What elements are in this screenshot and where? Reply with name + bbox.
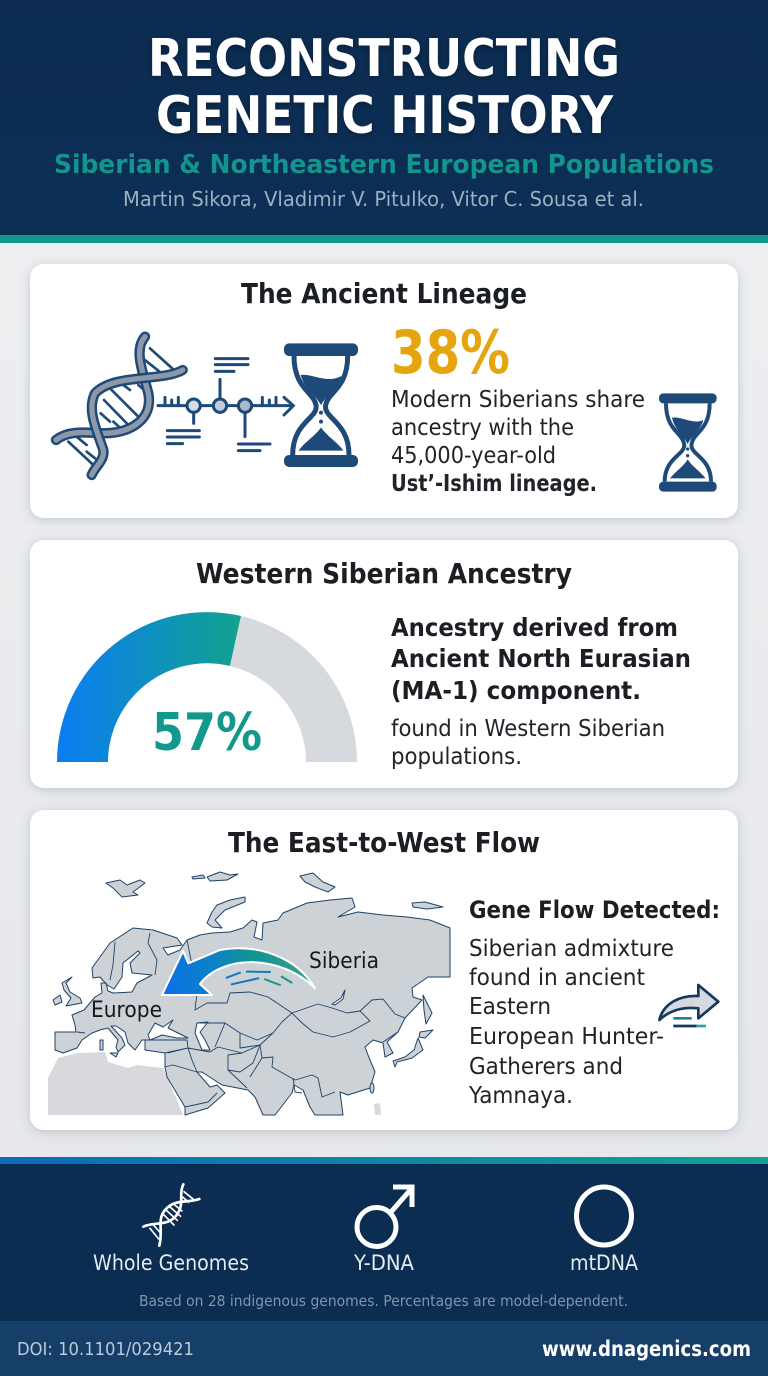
label: europe: Europe (91, 998, 162, 1023)
text: gene flow description: Yamnaya. (468, 1083, 573, 1109)
text: ust-ishim description: Modern Siberians share (391, 387, 645, 413)
map: middle east land patch (166, 1040, 262, 1088)
icon: dna helix (56, 337, 183, 475)
icon: mtdna circle (576, 1187, 632, 1245)
chart: gauge 57% (57, 612, 357, 763)
arrow dashes (227, 972, 292, 985)
panel: east-to-west flow (30, 810, 738, 1130)
label: mtdna: mtDNA (570, 1251, 639, 1275)
text: gene flow description: Siberian admixture (469, 936, 674, 962)
timeline arrow (158, 359, 293, 451)
map: eurasia with gene flow arrow (48, 872, 450, 1115)
chart: gauge 57%: 57% (152, 703, 262, 763)
text: ancestry description: populations. (391, 744, 522, 770)
label: whole genomes: Whole Genomes (93, 1251, 249, 1275)
text: ancestry description (391, 613, 691, 770)
text: ancestry description: (MA-1) component. (391, 676, 641, 705)
text: gene flow description: Gene Flow Detected: (469, 896, 720, 924)
text: gene flow description: found in ancient (469, 965, 645, 991)
text: ust-ishim description: ancestry with the (391, 415, 574, 441)
title: GENETIC HISTORY (156, 86, 614, 146)
doi: DOI: 10.1101/029421 (17, 1339, 194, 1360)
text: gene flow description: Eastern (469, 994, 551, 1020)
icon: whole genomes dna (143, 1184, 199, 1246)
map: islands (53, 872, 443, 1093)
text: ancestry description: Ancient North Eurasian (391, 644, 691, 673)
heading: east-to-west flow: The East-to-West Flow (228, 826, 540, 859)
text: ust-ishim description (391, 387, 645, 497)
panel: western siberian ancestry (30, 540, 738, 788)
map: africa (48, 1052, 183, 1115)
text: gene flow description: Gatherers and (469, 1054, 623, 1080)
authors: Martin Sikora, Vladimir V. Pitulko, Vitor C. Sousa et al. (123, 187, 644, 211)
title (148, 29, 620, 146)
panel: the ancient lineage (30, 264, 738, 518)
icon: small hourglass (659, 393, 717, 492)
map: borders (77, 933, 405, 1107)
text: gene flow description: European Hunter- (469, 1024, 664, 1050)
stat: 38%: 38% (391, 318, 510, 388)
title: RECONSTRUCTING (148, 29, 620, 89)
footnote: Based on 28 indigenous genomes. Percentages are model-dependent. (139, 1292, 628, 1310)
text: ancestry description: found in Western Siberian (391, 716, 665, 742)
arrow: siberia to europe gene flow (162, 948, 315, 995)
icon: y-dna male symbol (357, 1187, 412, 1246)
subtitle: Siberian & Northeastern European Populations (54, 150, 714, 180)
heading: western siberian ancestry: Western Siberian Ancestry (196, 557, 572, 590)
label: siberia: Siberia (309, 949, 379, 974)
header band (0, 0, 768, 243)
text: ust-ishim description: Ust’-Ishim lineage. (391, 471, 597, 497)
map: eurasia land (53, 872, 450, 1115)
label: y-dna: Y-DNA (353, 1251, 415, 1275)
icon: dna to hourglass timeline (56, 337, 358, 475)
heading: ancient lineage: The Ancient Lineage (241, 277, 527, 310)
footer band (0, 1157, 768, 1376)
text: ust-ishim description: 45,000-year-old (391, 443, 556, 469)
text: gene flow description (468, 896, 720, 1109)
bottom bar (0, 1321, 768, 1376)
icon: flow arrow (659, 985, 718, 1026)
map: philippines (374, 1103, 381, 1115)
text: ancestry description: Ancestry derived from (391, 613, 678, 642)
icon: large hourglass (284, 343, 358, 467)
map: seas and lakes (148, 990, 345, 1050)
